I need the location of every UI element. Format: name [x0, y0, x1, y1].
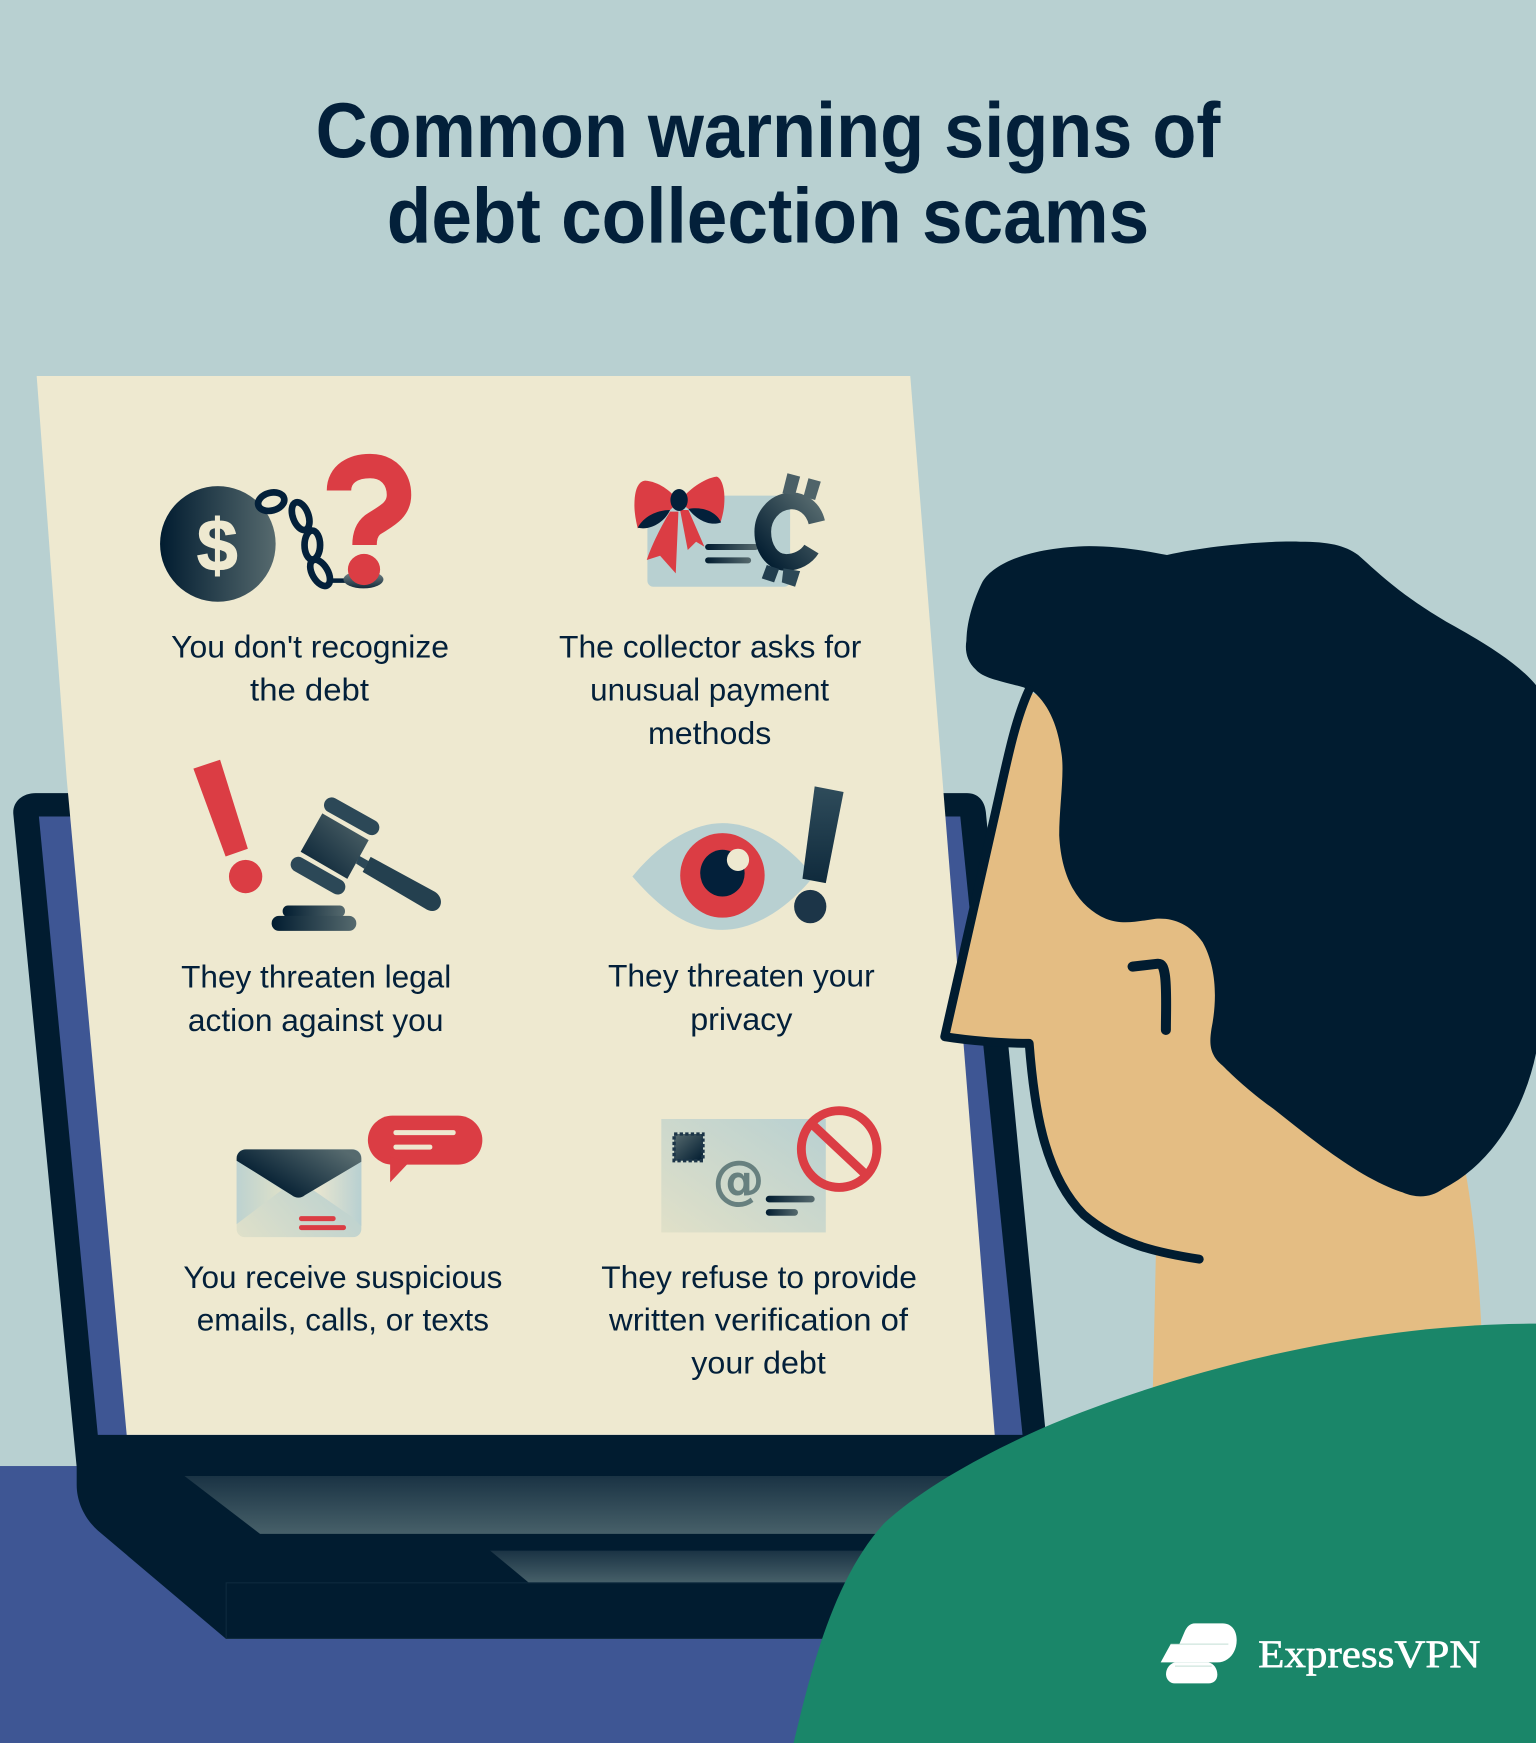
item: you don't recognize the debt: [160, 466, 449, 708]
item: threaten legal action: [181, 760, 451, 1038]
item: threaten your privacy: [608, 786, 875, 1037]
caption: emails, calls, or texts: [197, 1302, 489, 1337]
caption: They threaten legal: [181, 960, 451, 995]
caption: [559, 629, 861, 751]
item: refuse written verification: [601, 1111, 917, 1381]
icon: speech bubble: [368, 1116, 482, 1182]
face and neck: [945, 692, 1484, 1402]
laptop screen: [39, 816, 1023, 1435]
icon: ball and chain with question mark: [160, 466, 399, 602]
laptop: [13, 793, 1046, 1638]
caption: [181, 960, 451, 1038]
logo wordmark: ExpressVPN: [1258, 1632, 1480, 1676]
desk: [0, 1466, 1536, 1743]
logo mark: [1161, 1623, 1237, 1683]
title: Common warning signs of: [316, 88, 1221, 174]
icon: ball and chain with question mark: $: [197, 505, 238, 587]
title: debt collection scams: [387, 173, 1149, 259]
caption: [601, 1260, 917, 1381]
caption: action against you: [188, 1003, 443, 1038]
ear line: [1133, 964, 1166, 1030]
green shirt: [794, 1324, 1536, 1743]
caption: [608, 959, 875, 1037]
icon: envelope: [237, 1149, 361, 1237]
trackpad area: [490, 1551, 945, 1583]
icon: postcard with prohibited sign: @: [712, 1151, 765, 1211]
brand logo: [1161, 1623, 1480, 1683]
paper panel: [37, 376, 995, 1435]
icon: gavel: [272, 805, 441, 931]
caption: methods: [648, 716, 771, 751]
caption: They refuse to provide: [601, 1260, 917, 1295]
icon: eye with exclamation mark: [632, 786, 844, 930]
icon: exclamation mark: [193, 760, 262, 893]
face outline: [945, 690, 1199, 1259]
hair: [966, 542, 1536, 1196]
keyboard area: [184, 1476, 1000, 1534]
icon: postcard with prohibited sign: [661, 1111, 877, 1232]
caption: [183, 1260, 502, 1337]
person: [794, 542, 1536, 1743]
caption: The collector asks for: [559, 629, 861, 664]
caption: unusual payment: [590, 673, 829, 708]
caption: They threaten your: [608, 959, 875, 994]
item: unusual payment methods: [559, 473, 861, 751]
caption: You receive suspicious: [183, 1260, 502, 1295]
title: [316, 88, 1221, 259]
caption: privacy: [690, 1002, 793, 1037]
caption: written verification of: [608, 1302, 908, 1337]
caption: your debt: [691, 1346, 826, 1381]
icon: gift card with bow and coin symbol: [634, 473, 821, 587]
laptop body: [13, 793, 1046, 1638]
caption: the debt: [250, 673, 369, 708]
laptop front edge: [226, 1583, 1004, 1638]
caption: You don't recognize: [171, 629, 449, 664]
item: suspicious emails, calls, texts: [183, 1116, 502, 1337]
caption: [171, 629, 449, 708]
